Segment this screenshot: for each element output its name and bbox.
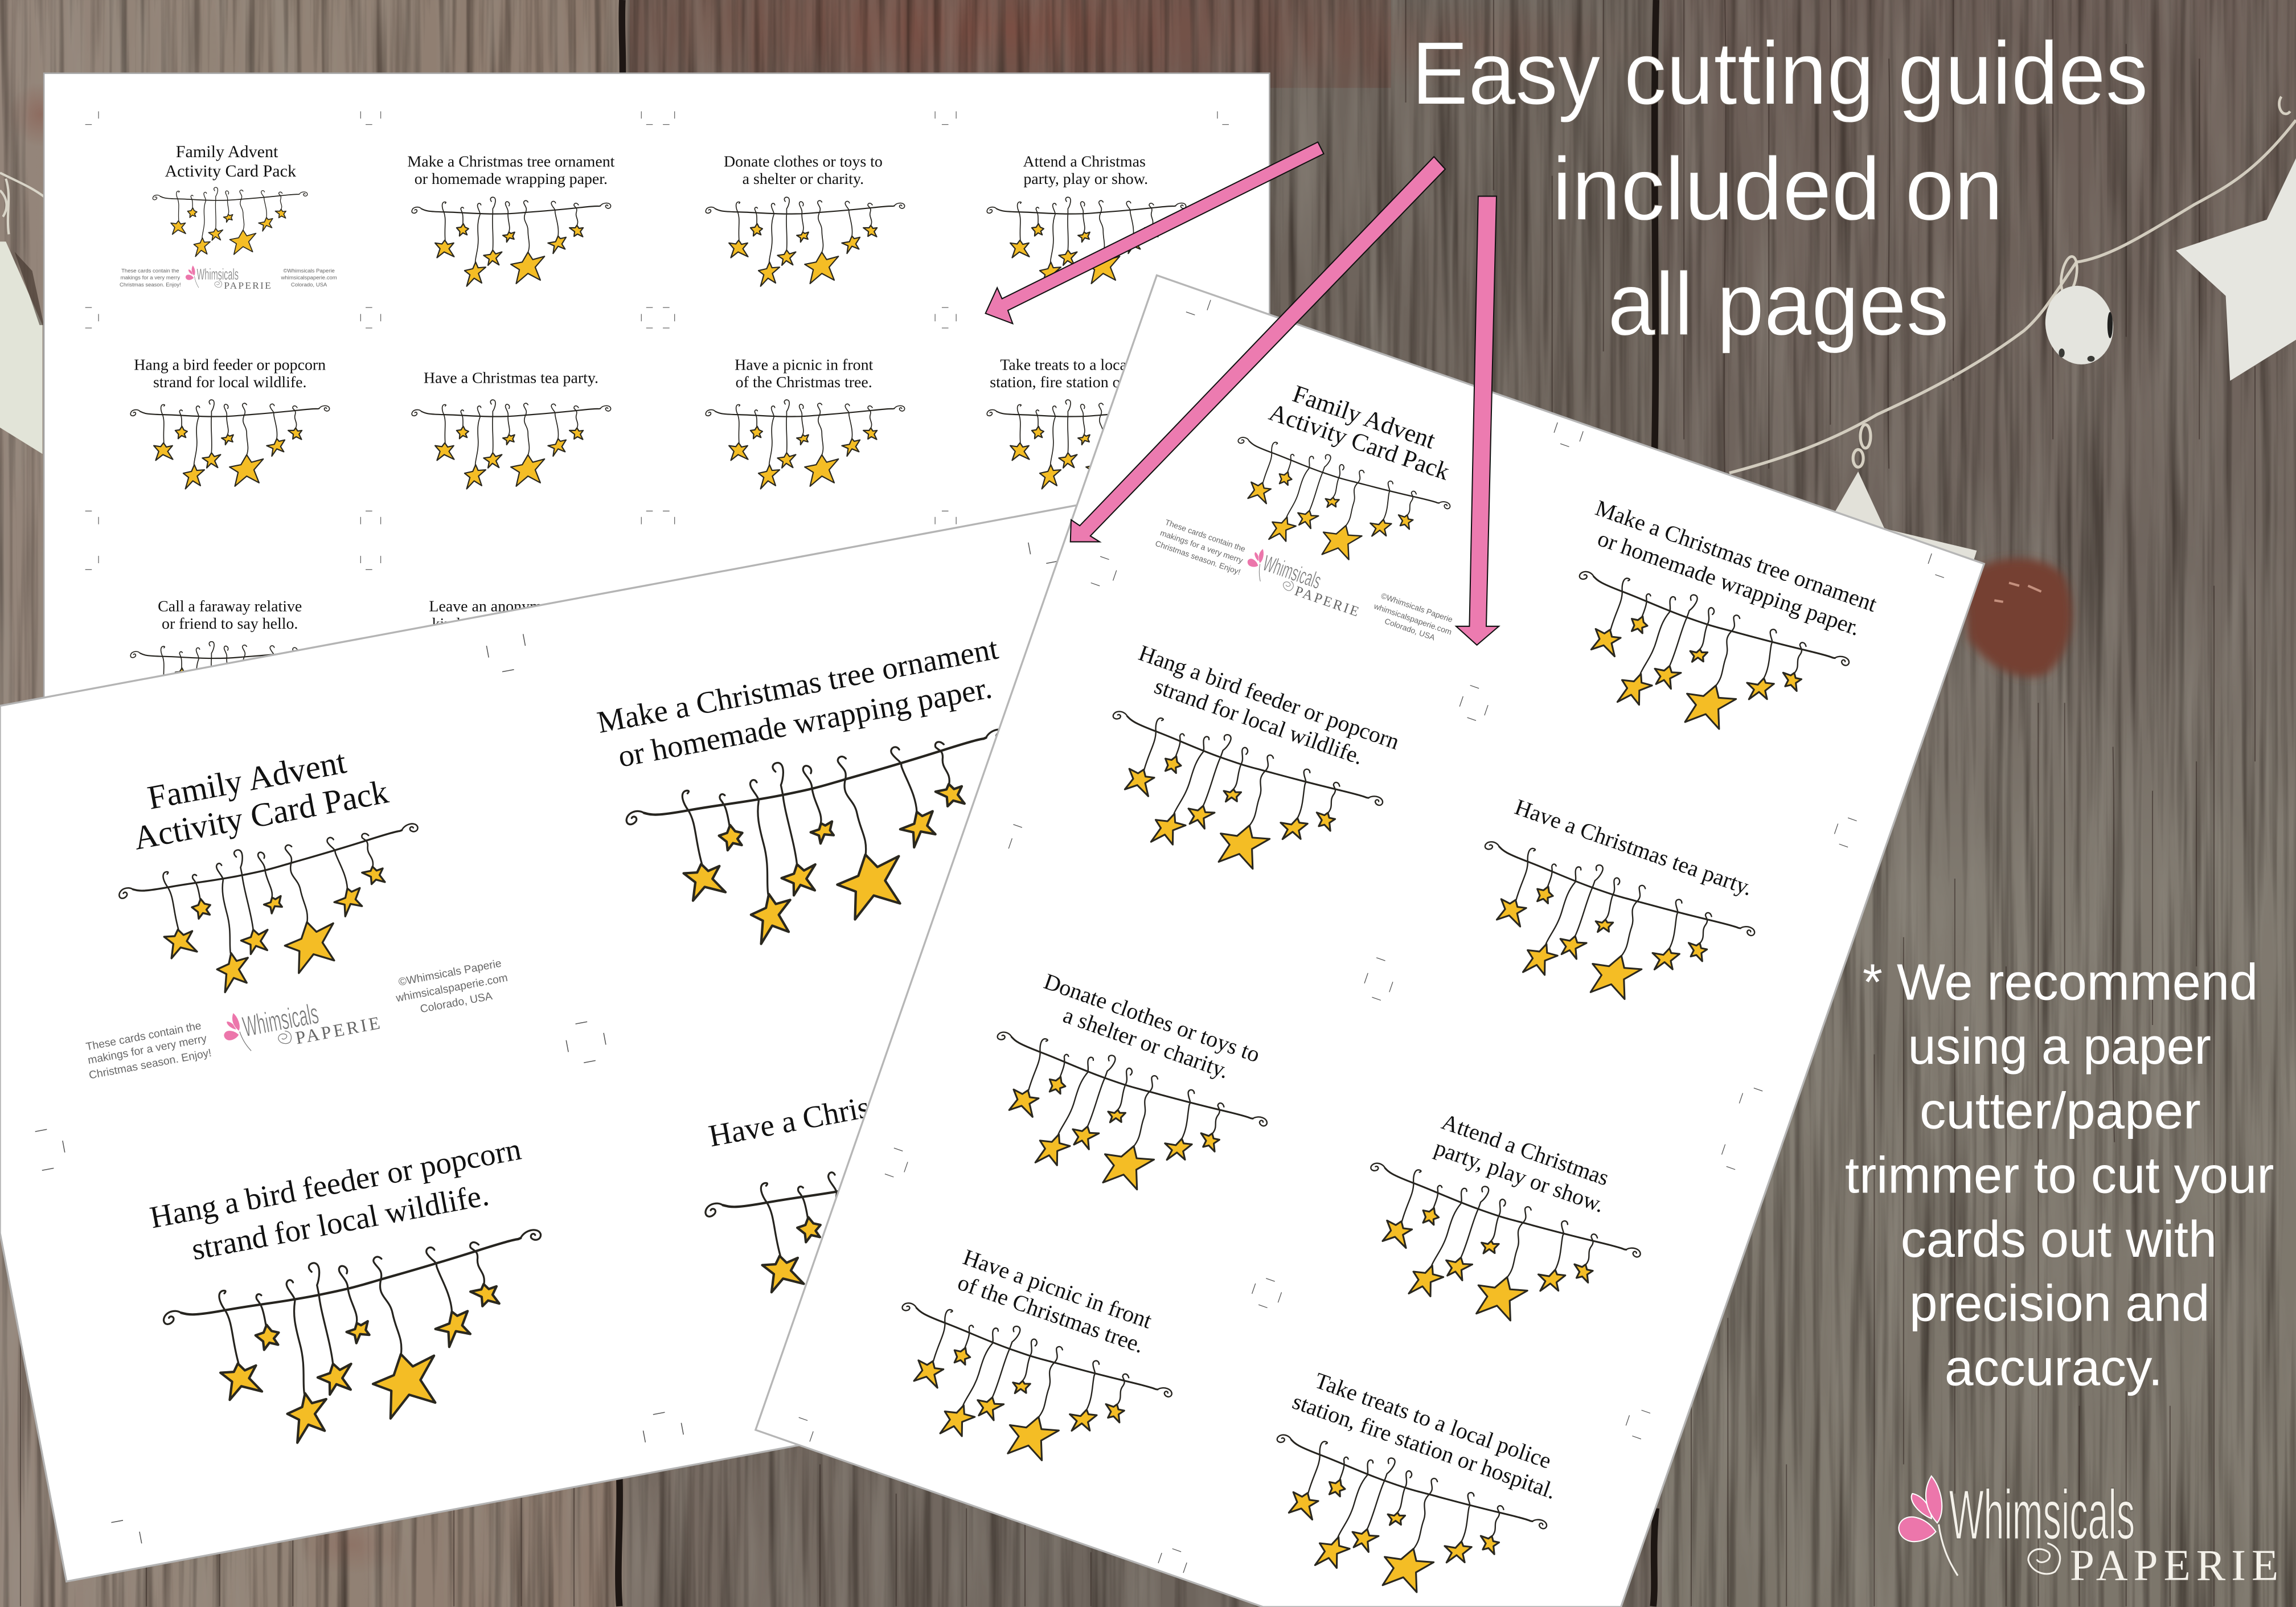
card: title card: ©Whimsicals Paperie <box>283 268 335 274</box>
card: title card: whimsicalspaperie.com <box>1372 601 1453 637</box>
heading: easy cutting guides: included on <box>1552 140 2003 239</box>
card: picnic: Have a picnic in front <box>960 1244 1155 1334</box>
card: picnic: of the Christmas tree. <box>954 1269 1147 1358</box>
icon: silver bell <box>2038 280 2121 371</box>
card: attend: party, play or show. <box>1432 1134 1608 1217</box>
card: donate <box>962 968 1271 1231</box>
card: title card: makings for a very merry <box>87 1033 208 1067</box>
card: title card: Whimsicals <box>240 997 321 1043</box>
card: ornament <box>407 153 615 286</box>
sheet 1: flat page <box>44 73 1269 893</box>
card: treats: Take treats to a local police <box>1000 356 1174 374</box>
card: attend <box>987 153 1186 286</box>
card: picnic: of the Christmas tree. <box>736 374 872 391</box>
card: anonymous <box>429 597 595 633</box>
card: bird feeder: Hang a bird feeder or popcorn <box>147 1132 524 1235</box>
card: attend <box>1335 1109 1645 1362</box>
card: title card: Christmas season. Enjoy! <box>1154 539 1242 576</box>
sheet 3: rotated portrait page <box>756 275 1984 1607</box>
card: donate <box>706 153 905 286</box>
card: title card: These cards contain the <box>1164 518 1247 554</box>
arrow: to sheet 1 <box>986 142 1324 323</box>
card: donate: a shelter or charity. <box>1060 1002 1232 1084</box>
text block: paper cutter recommendation: trimmer to cut your <box>1845 1147 2274 1204</box>
text block: paper cutter recommendation: cutter/paper <box>1920 1083 2201 1140</box>
heading: easy cutting guides: all pages <box>1608 255 1949 354</box>
card: bird feeder <box>130 356 330 489</box>
card: ornament: Make a Christmas tree ornament <box>407 153 615 170</box>
card: title card: Family Advent <box>176 142 278 161</box>
icon: white star right <box>2176 158 2296 381</box>
card: bird feeder: strand for local wildlife. <box>1151 673 1367 769</box>
card: title card: ©Whimsicals Paperie <box>1380 591 1454 624</box>
card: title card: Colorado, USA <box>291 282 327 288</box>
card: ornament: Make a Christmas tree ornament <box>1592 495 1880 617</box>
card: bird feeder <box>147 1132 572 1464</box>
card: title card: Whimsicals <box>197 265 239 283</box>
card: treats <box>1241 1367 1560 1607</box>
card: title card <box>1154 380 1454 642</box>
text block: paper cutter recommendation: accuracy. <box>1945 1340 2163 1397</box>
card: title card: PAPERIE <box>294 1012 382 1048</box>
card: title card: Christmas season. Enjoy! <box>88 1047 212 1082</box>
card: ornament: or homemade wrapping paper. <box>415 170 608 188</box>
card: title card: PAPERIE <box>224 280 271 291</box>
heading: easy cutting guides <box>1412 24 2148 354</box>
card: tea party <box>700 1056 1113 1356</box>
heading: easy cutting guides: Easy cutting guides <box>1412 24 2148 124</box>
card: tea party <box>412 369 611 489</box>
card: picnic <box>867 1244 1176 1502</box>
logo: Whimsicals Paperie: Whimsicals <box>1949 1476 2135 1555</box>
card: title card: makings for a very merry <box>1159 528 1244 565</box>
card: bird feeder <box>1077 639 1403 911</box>
card: bird feeder: Hang a bird feeder or popcorn <box>1135 639 1403 755</box>
card: title card: Christmas season. Enjoy! <box>120 282 181 288</box>
card: anonymous: kind note. <box>432 615 495 633</box>
card: attend: party, play or show. <box>1023 170 1148 188</box>
sheet 2: rotated enlarged page <box>0 487 1318 1581</box>
arrow: to sheet 3 <box>1456 196 1499 645</box>
card: treats <box>987 356 1186 489</box>
card: ornament: Make a Christmas tree ornament <box>594 631 1001 740</box>
text block: paper cutter recommendation: cards out with <box>1901 1211 2217 1268</box>
text block: paper cutter recommendation: using a paper <box>1908 1018 2211 1075</box>
card: tea party: Have a Christmas tea party. <box>706 1056 1050 1153</box>
card: ornament: or homemade wrapping paper. <box>1594 525 1863 641</box>
card: title card: Activity Card Pack <box>165 161 297 181</box>
card: attend: Attend a Christmas <box>1023 153 1146 170</box>
card: donate: Donate clothes or toys to <box>724 153 883 170</box>
card: treats: station, fire station or hospital. <box>990 374 1184 391</box>
card: title card <box>85 743 509 1082</box>
card: picnic <box>706 356 905 489</box>
card: title card: Colorado, USA <box>419 990 493 1015</box>
card: treats: station, fire station or hospital. <box>1289 1388 1560 1504</box>
card: title card: whimsicalspaperie.com <box>395 972 509 1005</box>
card: bird feeder: strand for local wildlife. <box>189 1177 491 1266</box>
card: tea party: Have a Christmas tea party. <box>1511 794 1756 900</box>
card: donate: a shelter or charity. <box>743 170 864 188</box>
text block: paper cutter recommendation: precision and <box>1909 1275 2209 1332</box>
card: tea party: Have a Christmas tea party. <box>424 369 598 387</box>
card: anonymous: Leave an anonymous note <box>429 597 595 615</box>
icon: white star left <box>0 173 46 454</box>
logo: Whimsicals Paperie: PAPERIE <box>2070 1541 2278 1590</box>
card: title card: ©Whimsicals Paperie <box>397 958 502 989</box>
card: ornament: or homemade wrapping paper. <box>615 670 994 774</box>
text block: paper cutter recommendation: * We recommend <box>1863 954 2258 1011</box>
card: picnic: Have a picnic in front <box>735 356 874 374</box>
card: call relative: Call a faraway relative <box>158 597 302 615</box>
arrow: to sheet 2 <box>1071 157 1445 542</box>
card: ornament <box>594 631 1038 965</box>
card: donate: Donate clothes or toys to <box>1041 968 1263 1067</box>
card: title card: Activity Card Pack <box>1266 399 1453 486</box>
card: ornament <box>1544 495 1880 770</box>
text block: paper cutter recommendation <box>1845 954 2274 1397</box>
decoration: white bell garland string <box>0 97 2296 677</box>
card: treats: Take treats to a local police <box>1311 1367 1555 1474</box>
icon: white star center behind sheet <box>1816 472 1977 574</box>
icon: wood knot <box>1965 559 2072 677</box>
card: call relative <box>130 597 330 731</box>
card: title card: Whimsicals <box>1260 551 1325 594</box>
card: title card: These cards contain the <box>121 268 179 274</box>
card: title card: Family Advent <box>145 743 350 817</box>
logo: Whimsicals Paperie <box>1899 1476 2278 1590</box>
card: title card: Colorado, USA <box>1383 616 1437 642</box>
card: call relative: or friend to say hello. <box>162 615 298 633</box>
card: title card: These cards contain the <box>85 1020 202 1053</box>
card: title card: Activity Card Pack <box>130 772 391 857</box>
card: bird feeder: Hang a bird feeder or popcorn <box>134 356 326 374</box>
card: title card: Family Advent <box>1289 380 1438 454</box>
card: title card: PAPERIE <box>1293 583 1361 620</box>
card: bird feeder: strand for local wildlife. <box>153 374 306 391</box>
card: tea party <box>1449 794 1758 1041</box>
card: title card: whimsicalspaperie.com <box>280 275 337 281</box>
card: title card: makings for a very merry <box>121 275 180 281</box>
card: title card <box>120 142 337 291</box>
card: attend: Attend a Christmas <box>1438 1109 1612 1191</box>
